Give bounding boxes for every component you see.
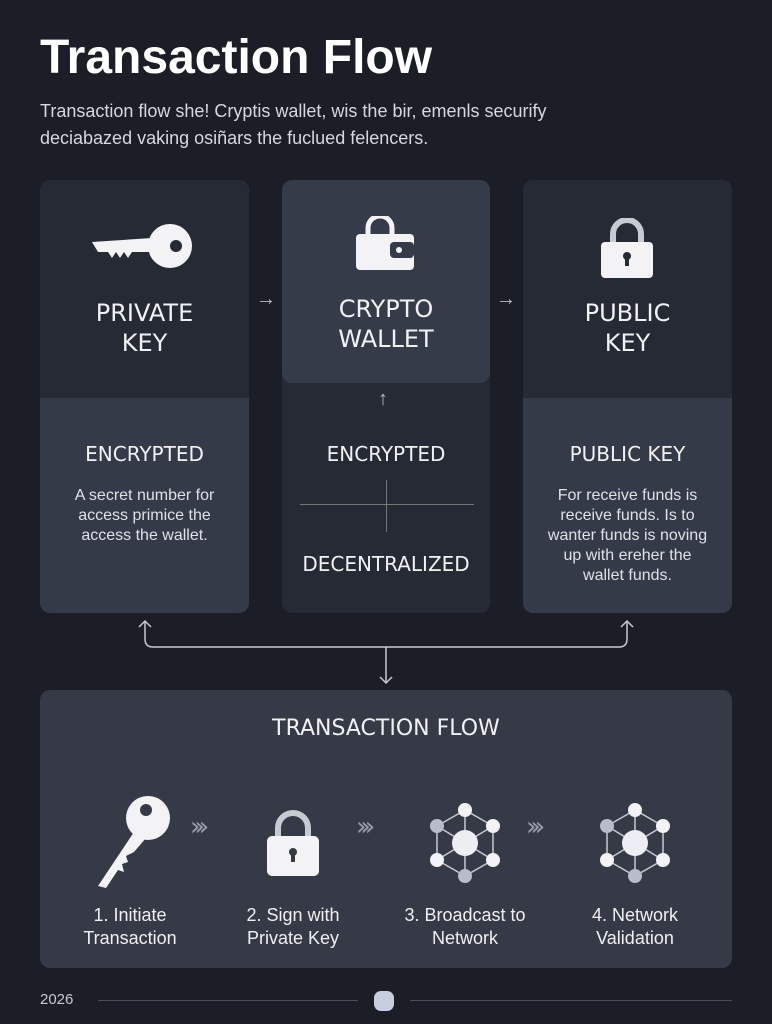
subtitle: Transaction flow she! Cryptis wallet, wis the bir, emenls securify deciabazed vaking osiñars the fuclued felencers. [40, 101, 547, 148]
icon: key [92, 224, 192, 268]
chevrons: ››› [526, 812, 539, 842]
title: Transaction Flow [40, 31, 432, 84]
subheading: ENCRYPTED [85, 442, 204, 466]
icon: lock [601, 218, 653, 278]
text: For receive funds is receive funds. Is to wanter funds is noving up with ereher the wallet funds. [548, 487, 707, 584]
subheading: PUBLIC KEY [570, 442, 685, 466]
heading: CRYPTO [339, 295, 433, 323]
step 1: 1. Initiate Transaction [83, 905, 177, 948]
step 1 [83, 796, 177, 948]
step 4 [592, 803, 678, 948]
heading [96, 299, 193, 357]
footer icon [374, 991, 394, 1011]
panel: public key [523, 180, 732, 613]
chevrons: ››› [356, 812, 369, 842]
icon: wallet [356, 216, 414, 270]
text: A secret number for access primice the access the wallet. [75, 487, 214, 544]
panel: private key [40, 180, 249, 613]
step 2: 2. Sign with Private Key [246, 905, 340, 948]
arrow: → [256, 288, 276, 310]
heading: TRANSACTION FLOW [272, 716, 500, 741]
step 3 [404, 803, 526, 948]
panel: transaction flow [40, 690, 732, 968]
panel: crypto wallet [282, 180, 490, 613]
heading: KEY [122, 329, 167, 357]
chevrons: ››› [190, 812, 203, 842]
heading: KEY [605, 329, 650, 357]
arrow up: ↑ [378, 388, 388, 410]
arrow: → [496, 288, 516, 310]
connector arrows [138, 620, 634, 684]
step 2 [246, 810, 340, 948]
subheading: ENCRYPTED [327, 442, 445, 466]
heading: WALLET [338, 325, 434, 353]
heading: PUBLIC [585, 299, 670, 327]
step 4: 4. Network Validation [592, 905, 678, 948]
subheading: DECENTRALIZED [302, 552, 470, 576]
step 3: 3. Broadcast to Network [404, 905, 526, 948]
heading: PRIVATE [96, 299, 193, 327]
heading [585, 299, 670, 357]
footer year: 2026 [40, 991, 73, 1008]
heading [338, 295, 434, 353]
